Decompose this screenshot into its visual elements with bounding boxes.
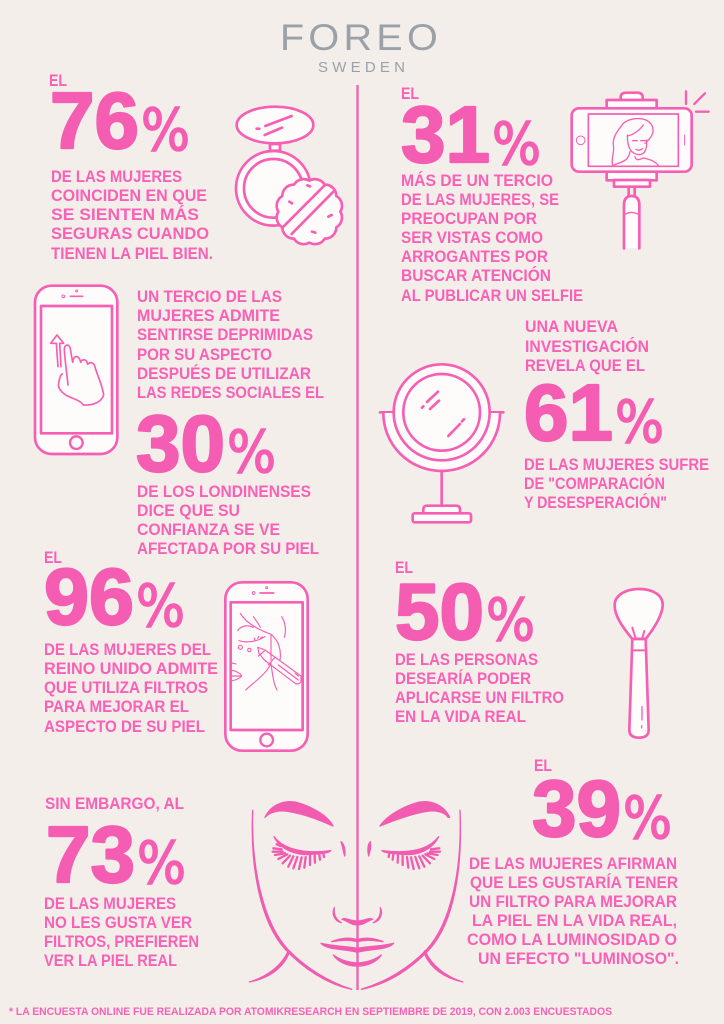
- panel: 50%: EN LA VIDA REAL: [395, 708, 526, 726]
- panel: 96%: [44, 549, 218, 736]
- panel: 30%: SENTIRSE DEPRIMIDAS: [137, 326, 313, 344]
- logo: FOREO Sweden: SWEDEN: [318, 59, 405, 76]
- panel: 31%: EL: [401, 85, 419, 103]
- panel: 96%: %: [136, 572, 185, 640]
- panel: 61%: [524, 318, 709, 512]
- panel: 31%: AL PUBLICAR UN SELFIE: [401, 287, 583, 305]
- panel: 96%: DE LAS MUJERES DEL: [44, 641, 211, 659]
- panel: 31%: ARROGANTES POR: [401, 248, 548, 266]
- panel: 39%: DE LAS MUJERES AFIRMAN: [469, 855, 677, 873]
- panel: 39%: QUE LES GUSTARÍA TENER: [470, 873, 678, 892]
- panel: 39%: [467, 757, 679, 968]
- panel: 76%: SE SIENTEN MÁS: [51, 205, 199, 224]
- panel: 31%: DE LAS MUJERES, SE: [401, 191, 559, 209]
- panel: 73%: FILTROS, PREFIEREN: [44, 933, 199, 951]
- icon: makeup brush: [615, 589, 663, 738]
- icon: table mirror: [380, 364, 503, 522]
- panel: 61%: UNA NUEVA: [525, 318, 618, 336]
- panel: 39%: 39: [532, 764, 621, 853]
- panel: 73%: 73: [46, 810, 135, 899]
- panel: 73%: VER LA PIEL REAL: [44, 952, 177, 970]
- panel: 31%: MÁS DE UN TERCIO: [401, 171, 553, 190]
- logo: FOREO Sweden: FOREO: [280, 17, 442, 58]
- panel: 31%: SER VISTAS COMO: [401, 229, 543, 247]
- panel: 50%: DE LAS PERSONAS: [395, 651, 538, 669]
- footnote: * LA ENCUESTA ONLINE FUE REALIZADA POR ATOMIKRESEARCH EN SEPTIEMBRE DE 2019, CON 2.003 ENCUESTADOS: [9, 1006, 612, 1018]
- icon: face illustration: [249, 802, 463, 989]
- panel: 76%: 76: [50, 76, 139, 165]
- left half of face: [249, 802, 357, 989]
- panel: 30%: MUJERES ADMITE: [137, 307, 280, 325]
- panel: 96%: 96: [44, 552, 134, 641]
- panel: 96%: ASPECTO DE SU PIEL: [44, 718, 205, 736]
- panel: 76%: EL: [49, 72, 67, 90]
- panel: 76%: DE LAS MUJERES: [51, 168, 182, 186]
- panel: 39%: COMO LA LUMINOSIDAD O: [467, 931, 677, 949]
- panel: 96%: QUE UTILIZA FILTROS: [44, 679, 208, 697]
- panel: 50%: 50: [395, 567, 484, 656]
- panel: 50%: EL: [395, 559, 413, 577]
- panel: 50%: APLICARSE UN FILTRO: [395, 689, 564, 707]
- logo: FOREO Sweden: [280, 17, 442, 76]
- panel: 76%: %: [141, 96, 190, 164]
- panel: 30%: LAS REDES SOCIALES EL: [137, 384, 324, 402]
- panel: 73%: NO LES GUSTA VER: [44, 914, 192, 932]
- panel: 76%: COINCIDEN EN QUE: [51, 187, 207, 205]
- panel: 39%: LA PIEL EN LA VIDA REAL,: [472, 912, 677, 930]
- icon: selfie stick: [572, 91, 709, 248]
- panel: 30%: [136, 288, 324, 558]
- panel: 96%: EL: [44, 549, 62, 567]
- panel: 61%: INVESTIGACIÓN: [525, 337, 649, 356]
- panel: 31%: %: [492, 110, 541, 178]
- panel: 61%: 61: [524, 368, 613, 457]
- panel: 61%: DE LAS MUJERES SUFRE: [524, 456, 709, 474]
- panel: 31%: PREOCUPAN POR: [401, 210, 537, 228]
- icon: phone with swiping hand: [35, 286, 117, 454]
- panel: 61%: DE "COMPARACIÓN: [524, 474, 665, 493]
- panel: 30%: UN TERCIO DE LAS: [137, 288, 282, 306]
- panel: 30%: DICE QUE SU: [137, 502, 240, 520]
- panel: 96%: REINO UNIDO ADMITE: [44, 660, 218, 678]
- panel: 30%: %: [227, 418, 276, 486]
- panel: 30%: CONFIANZA SE VE: [137, 521, 280, 539]
- panel: 61%: %: [615, 388, 664, 456]
- panel: 31%: 31: [401, 90, 490, 179]
- icon: phone with face and concealer pen: [225, 582, 308, 751]
- right half of face: [357, 802, 463, 989]
- panel: 76%: TIENEN LA PIEL BIEN.: [51, 245, 213, 263]
- panel: 76%: SEGURAS CUANDO: [51, 225, 209, 243]
- panel: 73%: DE LAS MUJERES: [44, 895, 176, 913]
- panel: 30%: POR SU ASPECTO: [137, 346, 272, 364]
- panel: 61%: Y DESESPERACIÓN": [524, 493, 667, 512]
- icon: compact powder: [236, 107, 342, 244]
- panel: 30%: AFECTADA POR SU PIEL: [137, 540, 319, 558]
- panel: 73%: %: [137, 829, 186, 897]
- panel: 30%: DESPUÉS DE UTILIZAR: [137, 364, 311, 383]
- panel: 50%: DESEARÍA PODER: [395, 669, 531, 688]
- panel: 96%: PARA MEJORAR EL: [44, 698, 189, 716]
- panel: 39%: UN EFECTO "LUMINOSO".: [478, 950, 679, 968]
- panel: 73%: SIN EMBARGO, AL: [45, 795, 184, 813]
- panel: 39%: %: [623, 784, 672, 852]
- panel: 73%: [44, 795, 199, 970]
- panel: 50%: [395, 559, 564, 726]
- panel: 31%: BUSCAR ATENCIÓN: [401, 266, 551, 285]
- panel: 30%: 30: [136, 399, 225, 488]
- panel: 39%: UN FILTRO PARA MEJORAR: [469, 893, 677, 911]
- center divider line: [356, 85, 359, 990]
- panel: 76%: [49, 72, 213, 263]
- panel: 31%: [401, 85, 583, 305]
- panel: 50%: %: [486, 586, 535, 654]
- panel: 30%: DE LOS LONDINENSES: [137, 483, 311, 501]
- panel: 39%: EL: [534, 757, 552, 775]
- panel: 61%: REVELA QUE EL: [525, 357, 645, 375]
